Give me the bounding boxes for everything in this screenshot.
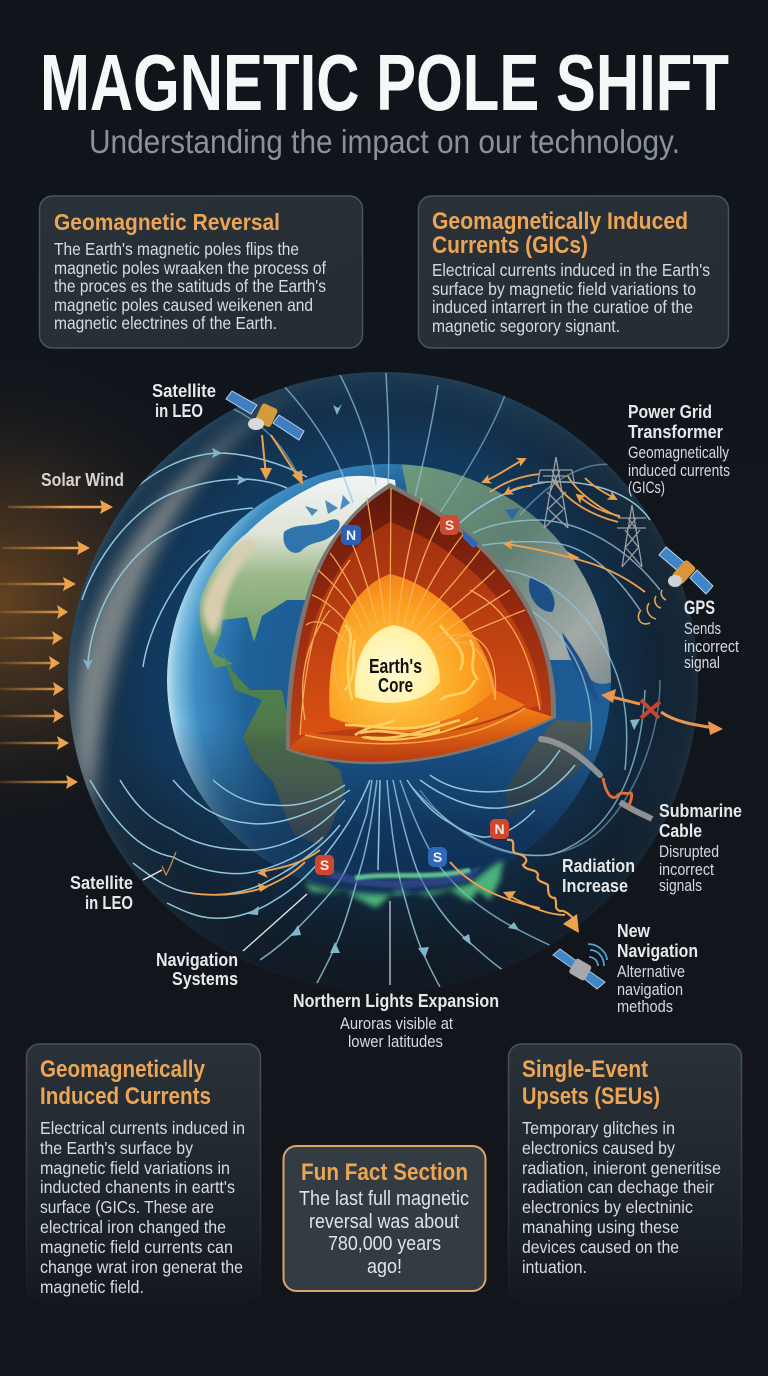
field arrowheads (83, 404, 640, 958)
label: new navigation: New (617, 921, 651, 941)
label: northern lights expansion: lower latitudes (348, 1033, 443, 1051)
earth core cutaway (286, 483, 556, 764)
panel: single-event upsets: devices caused on the (522, 1237, 679, 1257)
label: power grid transformer: Transformer (628, 422, 723, 442)
panel: fun fact: ago! (367, 1256, 402, 1278)
panel: geomagnetic reversal: magnetic electrines of the Earth. (54, 313, 277, 333)
inner core (355, 625, 440, 703)
upper mantle (300, 522, 542, 735)
aurora (304, 860, 503, 908)
label: submarine cable: Submarine (659, 801, 742, 821)
panel: single-event upsets (508, 1044, 742, 1302)
panel: geomagnetic reversal: The Earth's magnetic poles flips the (54, 239, 299, 259)
panel: geomagnetic reversal: Geomagnetic Reversal (54, 209, 280, 235)
label: submarine cable: incorrect (659, 861, 714, 879)
panel: geomagnetic reversal: the proces es the satituds of the Earth's (54, 276, 326, 296)
icon: beige coast (203, 538, 258, 636)
panel: geomagnetic reversal: magnetic poles caused weikenen and (54, 295, 313, 315)
label: satellite in leo bottom (70, 873, 133, 913)
marker: blue tip (463, 530, 479, 548)
label: power grid transformer: Power Grid (628, 402, 712, 422)
mantle layer (290, 488, 551, 760)
icon: ocean patches right (529, 578, 555, 612)
earth's core label: Core (378, 675, 413, 697)
label: power grid transformer (628, 402, 730, 497)
icon: african land (400, 455, 618, 684)
panel: fun fact: The last full magnetic (299, 1188, 469, 1210)
earth's core label (369, 656, 422, 697)
label: satellite in leo bottom: Satellite (70, 873, 133, 893)
marker: S top: S (445, 517, 454, 533)
marker: S bottom red: S (320, 857, 329, 873)
panel: geomagnetically induced currents top: Electrical currents induced in the Earth's (432, 260, 710, 280)
floor (288, 708, 553, 762)
radiation squiggle (503, 840, 579, 933)
icon: submarine cable (541, 739, 652, 819)
icon: gps satellite (638, 547, 713, 624)
subtitle: Understanding the impact on our technology. (89, 123, 680, 160)
panel: geomagnetic reversal: magnetic poles wraaken the process of (54, 258, 326, 278)
label: northern lights expansion (293, 901, 499, 1051)
wedge rim (286, 483, 556, 764)
panel: geomagnetically induced currents bottom: surface (GICs. These are (40, 1197, 214, 1217)
label: new navigation: Alternative (617, 963, 685, 981)
label: solar wind: Solar Wind (41, 470, 124, 490)
core field lines (300, 488, 540, 735)
icon: signal cross arrows (601, 689, 723, 735)
panel: single-event upsets: electronics caused by (522, 1138, 675, 1158)
label: navigation systems: Systems (172, 969, 238, 989)
panel: fun fact: 780,000 years (328, 1233, 441, 1255)
marker: S bottom blue: S (433, 849, 442, 865)
icon: south america (221, 650, 345, 845)
panel: geomagnetically induced currents top: Currents (GICs) (432, 232, 588, 259)
panel: geomagnetically induced currents bottom: Electrical currents induced in (40, 1118, 245, 1138)
earth globe (167, 455, 618, 896)
marker: N top: N (346, 527, 356, 543)
panel: geomagnetically induced currents bottom: inducted chanents in eartt's (40, 1177, 235, 1197)
panel: geomagnetically induced currents bottom: Induced Currents (40, 1083, 211, 1110)
panel: single-event upsets: intuation. (522, 1257, 587, 1277)
icon: power tower large (538, 457, 574, 528)
molten swirls (345, 625, 478, 738)
panel: geomagnetically induced currents top: induced intarrert in the curatioe of the (432, 297, 693, 317)
panel: geomagnetically induced currents bottom: Geomagnetically (40, 1056, 205, 1083)
label: submarine cable: signals (659, 877, 702, 895)
label: radiation increase (562, 856, 635, 896)
panel: single-event upsets: electronics by electninic (522, 1197, 693, 1217)
panel: geomagnetically induced currents bottom (26, 1044, 260, 1302)
earth's core label: Earth's (369, 656, 422, 678)
label: power grid transformer: Geomagnetically (628, 444, 730, 462)
panel: geomagnetically induced currents bottom: change wrat iron generat the (40, 1257, 243, 1277)
marker: N bottom red: N (494, 821, 505, 837)
icon: lower land (505, 720, 592, 818)
icon: satellite top (226, 391, 304, 485)
label: gps: GPS (684, 598, 715, 619)
panel: geomagnetically induced currents bottom: magnetic field variations in (40, 1158, 230, 1178)
label: satellite in leo top: Satellite (152, 381, 216, 401)
panel: geomagnetically induced currents top (418, 196, 728, 348)
label: satellite in leo bottom: in LEO (85, 893, 133, 913)
label: new navigation: methods (617, 998, 673, 1016)
panel: single-event upsets: Temporary glitches in (522, 1118, 675, 1138)
panel: fun fact: Fun Fact Section (301, 1159, 468, 1186)
label: gps: Sends (684, 620, 721, 638)
label: radiation increase: Radiation (562, 856, 635, 876)
label: satellite in leo top (152, 381, 216, 421)
solar wind arrows (0, 500, 113, 789)
panel: single-event upsets: Upsets (SEUs) (522, 1083, 660, 1110)
bottom left currents (143, 850, 540, 908)
panel: geomagnetically induced currents top: surface by magnetic field variations to (432, 279, 696, 299)
panel: single-event upsets: manahing using these (522, 1217, 679, 1237)
panel: geomagnetic reversal (40, 196, 362, 348)
panel: geomagnetically induced currents bottom: magnetic field. (40, 1277, 144, 1297)
label: power grid transformer: (GICs) (628, 479, 665, 497)
marker: S top (440, 515, 459, 535)
label: submarine cable: Disrupted (659, 843, 719, 861)
outer core (329, 574, 495, 728)
label: navigation systems (156, 894, 307, 989)
label: submarine cable: Cable (659, 821, 702, 841)
label: gps: incorrect (684, 638, 739, 656)
label: power grid transformer: induced currents (628, 462, 730, 480)
panel: geomagnetically induced currents bottom: magnetic field currents can (40, 1237, 233, 1257)
label: new navigation: Navigation (617, 941, 698, 961)
label: gps (684, 598, 739, 672)
panel: single-event upsets: radiation can dechage their (522, 1177, 714, 1197)
icon: hudson bay (283, 519, 340, 553)
label: northern lights expansion: Northern Lights Expansion (293, 991, 499, 1011)
label: submarine cable (659, 801, 742, 895)
panel: single-event upsets: Single-Event (522, 1056, 648, 1083)
currents arrows top right (483, 459, 645, 592)
icon: north america (200, 476, 400, 668)
panel: single-event upsets: radiation, inieront generitise (522, 1158, 721, 1178)
icon: new navigation satellite (553, 944, 607, 989)
marker: N top (341, 525, 361, 545)
label: new navigation (617, 921, 698, 1016)
label: gps: signal (684, 654, 720, 672)
panel: fun fact (284, 1146, 486, 1291)
marker: N bottom red (490, 819, 509, 839)
label: new navigation: navigation (617, 981, 683, 999)
icon: pole markers (315, 515, 509, 875)
label: navigation systems: Navigation (156, 950, 238, 970)
magnetic field lines outer (82, 373, 660, 987)
label: satellite in leo top: in LEO (155, 401, 203, 421)
panel: geomagnetically induced currents bottom: the Earth's surface by (40, 1138, 193, 1158)
label: northern lights expansion: Auroras visible at (340, 1015, 453, 1033)
marker: S bottom red (315, 855, 334, 875)
icon: power tower small (617, 505, 646, 567)
panel: geomagnetically induced currents bottom: electrical iron changed the (40, 1217, 226, 1237)
marker: S bottom blue (428, 847, 447, 867)
label: radiation increase: Increase (562, 876, 628, 896)
panel: geomagnetically induced currents top: magnetic segorory signant. (432, 316, 620, 336)
panel: geomagnetically induced currents top: Geomagnetically Induced (432, 208, 688, 235)
panel: fun fact: reversal was about (309, 1211, 459, 1233)
magnetosphere (68, 372, 698, 992)
